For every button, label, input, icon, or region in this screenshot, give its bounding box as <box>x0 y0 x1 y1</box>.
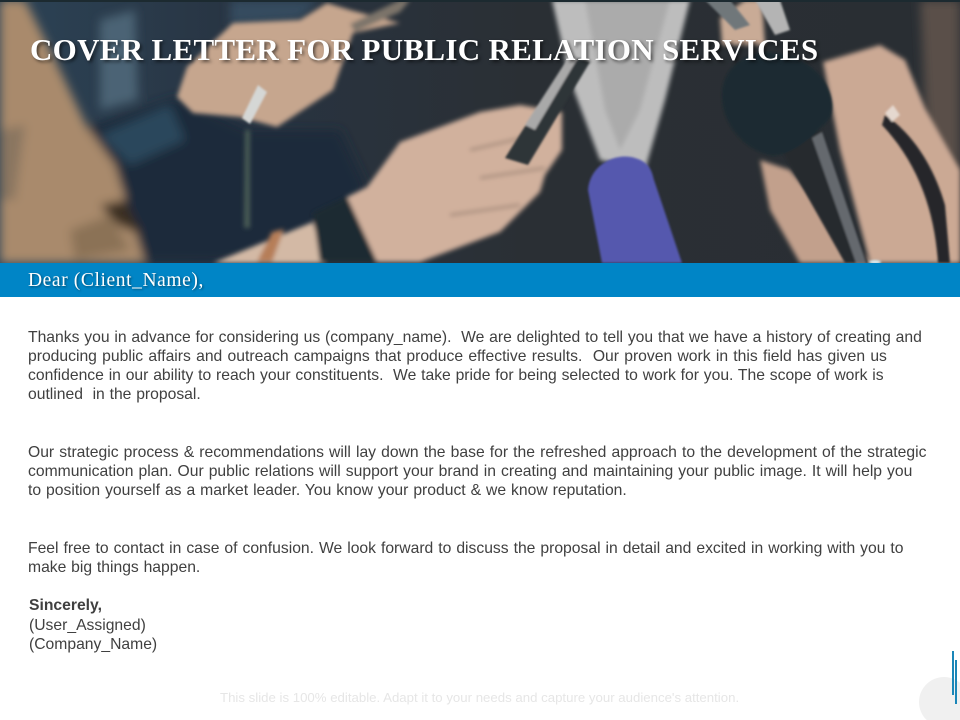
title: COVER LETTER FOR PUBLIC RELATION SERVICES <box>30 32 818 67</box>
letter paragraph 2: to position yourself as a market leader. You know your product & we know reputation. <box>28 482 627 499</box>
letter paragraph 2 <box>28 444 926 499</box>
corner accent lines <box>952 651 957 704</box>
letter paragraph 1: outlined in the proposal. <box>28 386 201 403</box>
letter paragraph 1: confidence in our ability to reach your constituents. We take pride for being selected to work for you. The scope of work is <box>28 367 884 384</box>
letter paragraph 3: make big things happen. <box>28 559 200 576</box>
salutation text: Dear (Client_Name), <box>28 270 204 291</box>
letter paragraph 2: Our strategic process & recommendations will lay down the base for the refreshed approach to the development of the strategic <box>28 444 926 461</box>
letter paragraph 3 <box>28 540 904 576</box>
salutation bar <box>0 263 960 297</box>
letter paragraph 2: communication plan. Our public relations will support your brand in creating and maintaining your public image. It will help you <box>28 463 912 480</box>
corner decoration circle <box>919 677 960 720</box>
hero photo: press microphones and hands <box>0 0 960 263</box>
signature block: (Company_Name) <box>29 636 157 653</box>
footer note: This slide is 100% editable. Adapt it to your needs and capture your audience's attention. <box>220 690 739 705</box>
letter paragraph 1 <box>28 329 922 403</box>
signature block <box>29 597 157 653</box>
letter paragraph 3: Feel free to contact in case of confusion. We look forward to discuss the proposal in detail and excited in working with you to <box>28 540 904 557</box>
letter paragraph 1: producing public affairs and outreach campaigns that produce effective results. Our proven work in this field has given us <box>28 348 887 365</box>
signature block: Sincerely, <box>29 597 102 614</box>
signature block: (User_Assigned) <box>29 617 146 634</box>
letter paragraph 1: Thanks you in advance for considering us (company_name). We are delighted to tell you that we have a history of creating and <box>28 329 922 346</box>
